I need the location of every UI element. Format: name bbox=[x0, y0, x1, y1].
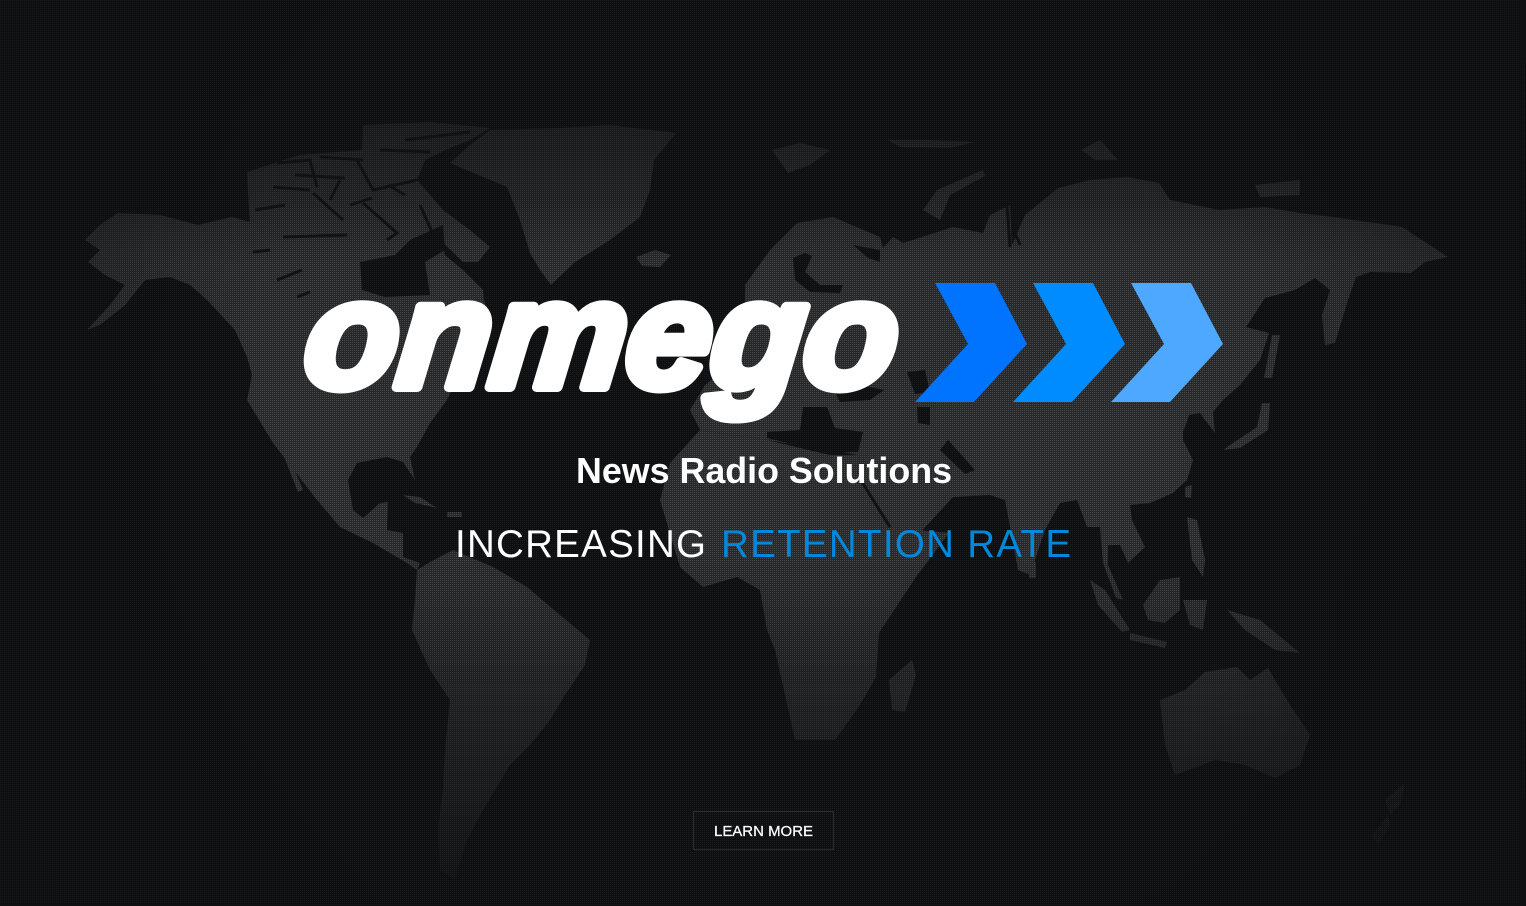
map: Eurasia bbox=[690, 177, 1448, 600]
chevron 3 bbox=[1111, 283, 1223, 402]
logo wordmark: onmego bbox=[298, 250, 907, 420]
headline white part: INCREASING bbox=[455, 523, 706, 566]
map: Africa bbox=[660, 430, 949, 740]
subtitle: News Radio Solutions bbox=[576, 450, 952, 491]
map: South America bbox=[412, 550, 590, 880]
map: islands bbox=[282, 140, 1405, 845]
map: Australia bbox=[1160, 667, 1310, 778]
map: Arctic Canada bbox=[247, 122, 490, 262]
headline bbox=[455, 523, 1071, 566]
chevron 1 bbox=[915, 283, 1027, 402]
learn more button bbox=[694, 812, 834, 850]
map: seas and lakes bbox=[253, 132, 1020, 527]
learn more button: LEARN MORE bbox=[714, 823, 813, 840]
logo chevrons bbox=[915, 283, 1223, 402]
map: Greenland bbox=[450, 125, 676, 285]
chevron 2 bbox=[1013, 283, 1125, 402]
headline blue part: RETENTION RATE bbox=[721, 523, 1071, 566]
map: North America bbox=[85, 213, 490, 570]
